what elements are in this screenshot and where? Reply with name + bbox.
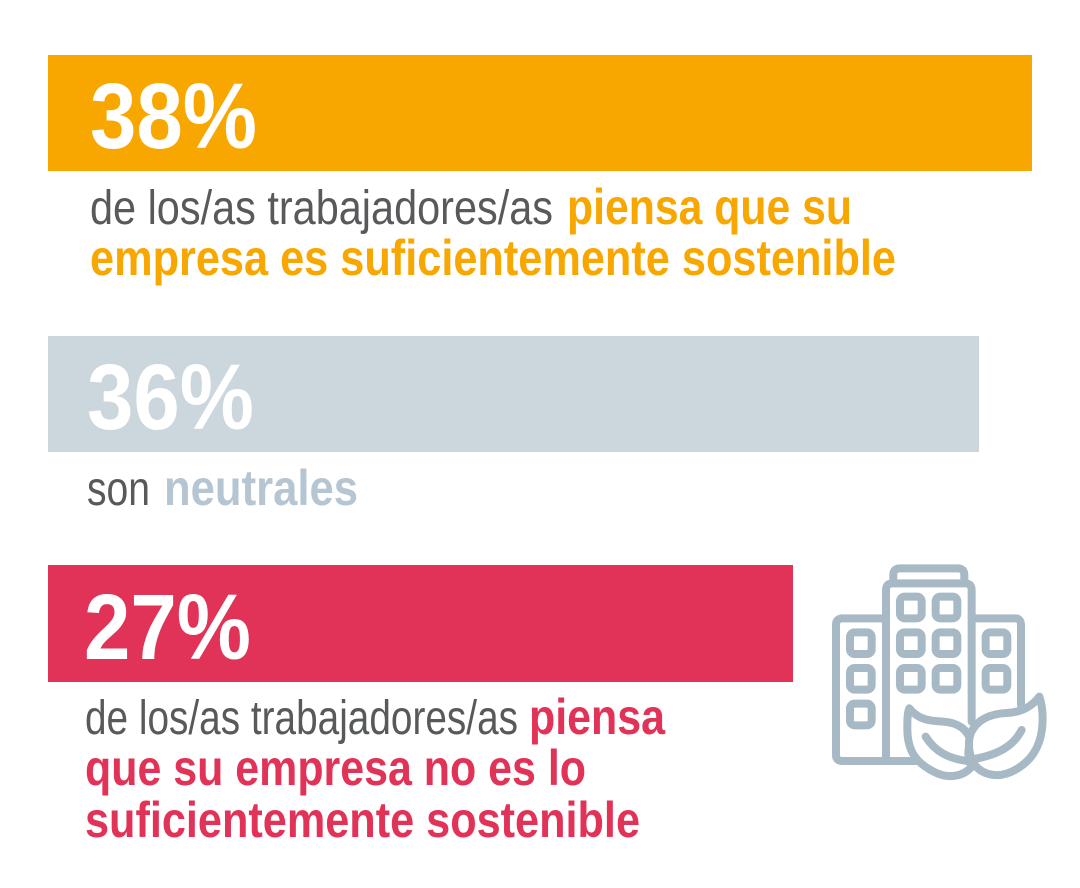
icon: buildings with leaves [836, 568, 1043, 776]
text: 38% description [90, 179, 896, 286]
text: 36% description: son [87, 463, 150, 516]
orange bar [48, 55, 1032, 171]
text: 27% description [85, 689, 666, 848]
text: 27% description: piensa [529, 689, 666, 745]
text: 27% description: suficientemente sostenible [85, 792, 640, 848]
panel: 38% statistic [48, 55, 1032, 286]
panel: 27% statistic [48, 565, 793, 848]
text: 36% description: neutrales [164, 460, 358, 516]
text: 36% description [87, 460, 358, 516]
number: 27%: 27% [84, 575, 251, 679]
number: 36%: 36% [87, 345, 254, 449]
grey bar [48, 336, 979, 452]
text: 27% description: de los/as trabajadores/as [85, 692, 518, 745]
panel: 36% statistic [48, 336, 979, 516]
text: 38% description: empresa es suficientemente sostenible [90, 230, 896, 286]
text: 27% description: que su empresa no es lo [85, 740, 586, 796]
text: 38% description: de los/as trabajadores/as [90, 182, 553, 235]
red bar [48, 565, 793, 682]
number: 38%: 38% [90, 64, 257, 168]
text: 38% description: piensa que su [567, 179, 852, 235]
